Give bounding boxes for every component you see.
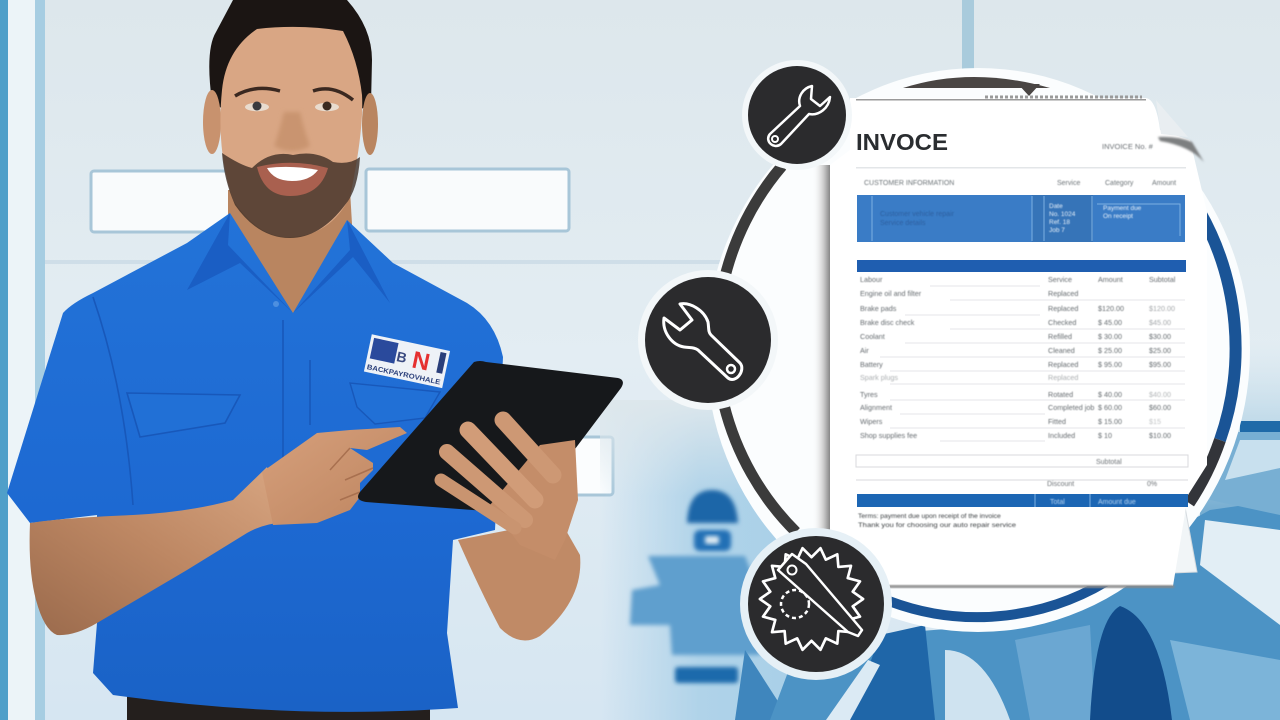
right forearm xyxy=(458,520,580,640)
table rows xyxy=(860,275,1176,440)
blue haze behind workshop xyxy=(600,400,820,720)
blue customer panel: No. 1024 xyxy=(1049,211,1076,218)
invoice title: INVOCE xyxy=(856,129,948,155)
table rows: Service xyxy=(1048,275,1072,284)
blue customer panel: Payment due xyxy=(1103,205,1142,212)
total bar xyxy=(857,494,1188,507)
table rows: $ 30.00 xyxy=(1098,332,1122,341)
invoice circle xyxy=(706,68,1250,632)
table rows: $ 45.00 xyxy=(1098,318,1122,327)
table rows: Alignment xyxy=(860,403,892,412)
total bar: Total xyxy=(1050,499,1065,506)
top arrow notch xyxy=(1018,84,1040,96)
table rows: Labour xyxy=(860,275,883,284)
table rows: Cleaned xyxy=(1048,346,1075,355)
shirt logo badge: B xyxy=(395,348,408,366)
table rows: Checked xyxy=(1048,318,1076,327)
holding hand xyxy=(441,420,578,560)
table rows: Engine oil and filter xyxy=(860,289,922,298)
top dark crescent xyxy=(903,77,1050,88)
table rows: Rotated xyxy=(1048,390,1073,399)
blue customer panel: Ref. 18 xyxy=(1049,219,1070,226)
table rows: $30.00 xyxy=(1149,332,1171,341)
teeth xyxy=(267,167,318,181)
table rows: $15 xyxy=(1149,417,1161,426)
inner broken gear xyxy=(781,590,809,618)
table rows: Tyres xyxy=(860,390,878,399)
icon: gear and spanner badge xyxy=(740,528,892,680)
table rows: Replaced xyxy=(1048,360,1078,369)
table rows: $120.00 xyxy=(1098,304,1124,313)
table rows: $120.00 xyxy=(1149,304,1175,313)
collar flaps xyxy=(187,213,293,313)
blurred car xyxy=(770,421,1280,720)
table rows: Spark plugs xyxy=(860,373,898,382)
table rows: Refilled xyxy=(1048,332,1072,341)
table rows: Battery xyxy=(860,360,883,369)
table rows: Brake pads xyxy=(860,304,897,313)
chest pocket right xyxy=(350,383,440,424)
table rows: $10.00 xyxy=(1149,431,1171,440)
spanner xyxy=(778,554,862,636)
table rows: Shop supplies fee xyxy=(860,431,917,440)
table rows: Replaced xyxy=(1048,304,1078,313)
placket and seam lines xyxy=(93,297,310,505)
column header labels: CUSTOMER INFORMATION xyxy=(864,180,954,187)
page curl xyxy=(1156,100,1188,137)
table rows: Wipers xyxy=(860,417,883,426)
blue customer panel xyxy=(857,195,1185,242)
table rows: $ 25.00 xyxy=(1098,346,1122,355)
table rows: $ 60.00 xyxy=(1098,403,1122,412)
left forearm xyxy=(30,467,285,635)
blurred machine in the workshop xyxy=(630,490,790,720)
table row rules xyxy=(880,286,1185,441)
blue customer panel: On receipt xyxy=(1103,213,1133,220)
table rows: Coolant xyxy=(860,332,885,341)
table rows: $45.00 xyxy=(1149,318,1171,327)
table rows: Air xyxy=(860,346,869,355)
table rows: $95.00 xyxy=(1149,360,1171,369)
table rows: $ 40.00 xyxy=(1098,390,1122,399)
table rows: Amount xyxy=(1098,275,1123,284)
tablet xyxy=(358,361,623,514)
table rows: $40.00 xyxy=(1149,390,1171,399)
gear outline xyxy=(760,548,863,650)
invoice number label: INVOICE No. # xyxy=(1102,142,1154,151)
total bar: Amount due xyxy=(1098,499,1136,506)
table rows: $ 95.00 xyxy=(1098,360,1122,369)
white circular backing xyxy=(706,68,1250,632)
icon: large wrench badge xyxy=(638,270,778,410)
face xyxy=(220,27,362,237)
footnotes: Terms: payment due upon receipt of the invoice xyxy=(858,513,1001,520)
ring: dark and blue arcs xyxy=(723,166,1236,617)
table rows: Completed job xyxy=(1048,403,1094,412)
totals box: Discount xyxy=(1047,481,1074,488)
table rows: Subtotal xyxy=(1149,275,1176,284)
totals box: 0% xyxy=(1147,481,1157,488)
hair cap xyxy=(209,0,372,120)
footnotes: Thank you for choosing our auto repair service xyxy=(858,522,1016,529)
pointing hand xyxy=(262,427,407,525)
table rows: Replaced xyxy=(1048,289,1078,298)
shirt logo badge: BACKPAYROVHALE xyxy=(366,364,441,387)
table rows: $ 10 xyxy=(1098,431,1112,440)
table rows: $25.00 xyxy=(1149,346,1171,355)
mouth xyxy=(257,163,328,196)
invoice sheet xyxy=(812,84,1207,588)
totals box: Subtotal xyxy=(1096,459,1122,466)
blue customer panel: Service details xyxy=(880,220,926,227)
table rows: Fitted xyxy=(1048,417,1066,426)
sheet shadow xyxy=(812,165,831,565)
nose shading xyxy=(274,112,310,151)
column header labels: Service xyxy=(1057,180,1080,187)
shirt logo badge: N xyxy=(410,347,432,377)
neck xyxy=(228,190,354,318)
head xyxy=(203,0,378,238)
blue customer panel: Date xyxy=(1049,203,1063,210)
blue customer panel: Job 7 xyxy=(1049,227,1065,234)
icon: small wrench badge xyxy=(742,60,852,170)
footnotes xyxy=(858,513,1016,529)
shirt logo badge xyxy=(364,334,450,388)
person: smiling mechanic xyxy=(7,0,623,720)
table rows: Replaced xyxy=(1048,373,1078,382)
blue shirt xyxy=(7,213,503,712)
table header bar xyxy=(857,260,1186,272)
table rows: Brake disc check xyxy=(860,318,915,327)
chest pocket left xyxy=(127,393,240,437)
table rows: Included xyxy=(1048,431,1075,440)
column header labels: Amount xyxy=(1152,180,1176,187)
back sheet xyxy=(1172,480,1197,573)
table rows: $ 15.00 xyxy=(1098,417,1122,426)
front sheet xyxy=(830,98,1207,586)
totals box xyxy=(856,455,1188,488)
column header labels: Category xyxy=(1105,180,1134,187)
belt xyxy=(127,695,430,720)
garage windows xyxy=(91,169,613,495)
blue customer panel: Customer vehicle repair xyxy=(880,211,955,218)
beard xyxy=(222,153,360,238)
table rows: $60.00 xyxy=(1149,403,1171,412)
column header labels xyxy=(864,180,1176,187)
eyes and brows xyxy=(235,88,280,96)
